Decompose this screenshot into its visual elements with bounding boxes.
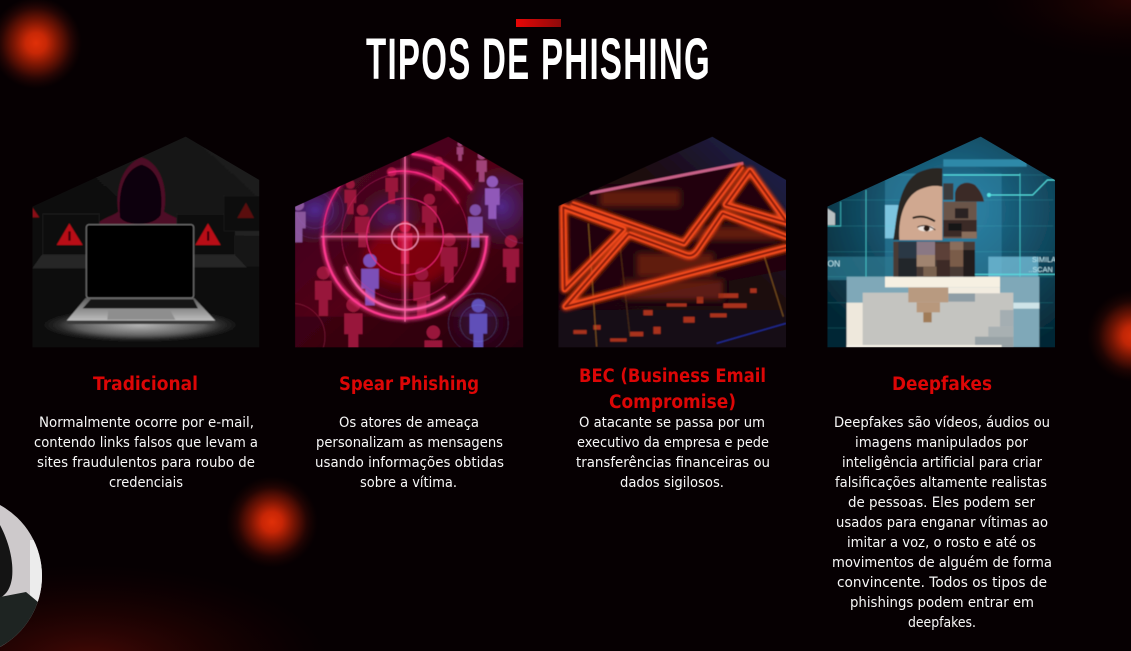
description: credenciais: [109, 475, 183, 491]
description: [34, 415, 258, 491]
description: Os atores de ameaça: [339, 415, 479, 431]
circuit glow below envelope: [573, 288, 757, 342]
title: TIPOS DE PHISHING: [366, 27, 710, 93]
description: Normalmente ocorre por e-mail,: [39, 415, 254, 431]
description: contendo links falsos que levam a: [34, 435, 258, 451]
description: [576, 415, 770, 491]
description: movimentos de alguém de forma: [832, 555, 1052, 571]
card 1: Tradicional: [34, 374, 258, 491]
heading: [579, 366, 766, 413]
top flap highlight: [590, 163, 743, 193]
description: imitar a voz, o rosto e até os: [847, 535, 1036, 551]
description: usados para enganar vítimas ao: [836, 515, 1048, 531]
description: imagens manipulados por: [855, 435, 1028, 451]
right face pixels: [943, 183, 984, 238]
description: Deepfakes são vídeos, áudios ou: [834, 415, 1050, 431]
description: sites fraudulentos para roubo de: [37, 455, 255, 471]
description: de pessoas. Eles podem ser: [848, 495, 1035, 511]
floor light: [44, 310, 236, 342]
description: O atacante se passa por um: [579, 415, 765, 431]
heading: Deepfakes: [892, 374, 992, 395]
description: phishings podem entrar em: [850, 595, 1034, 611]
description: sobre a vítima.: [360, 475, 457, 491]
side laptops: [32, 196, 261, 268]
image: deepfake pixelated face: ..SCAN: [1028, 265, 1053, 274]
scan grid: [827, 173, 1053, 347]
description: [315, 415, 504, 491]
heading: Compromise): [609, 392, 736, 413]
card 2: Spear Phishing: [315, 374, 504, 491]
image: deepfake pixelated face: SIMILA: [1032, 255, 1056, 264]
description: [832, 415, 1052, 631]
description: executivo da empresa e pede: [577, 435, 769, 451]
scan labels: ON: [827, 259, 840, 269]
description: convincente. Todos os tipos de: [837, 575, 1047, 591]
glow: top left: [0, 0, 84, 90]
card 3: BEC: [576, 366, 770, 491]
image: deepfake pixelated face: [827, 133, 1060, 350]
description: usando informações obtidas: [315, 455, 504, 471]
card 4: Deepfakes: [832, 374, 1052, 631]
description: transferências financeiras ou: [576, 455, 770, 471]
description: falsificações altamente realistas: [835, 475, 1047, 491]
glow: right edge: [1085, 288, 1131, 384]
lower face pixels: [893, 242, 975, 277]
people silhouettes: [295, 142, 520, 348]
image: hooded hacker and laptop: [30, 133, 263, 350]
description: dados sigilosos.: [620, 475, 724, 491]
description: deepfakes.: [908, 615, 976, 631]
heading: Spear Phishing: [339, 374, 479, 395]
presenter webcam: [0, 505, 42, 647]
description: personalizam as mensagens: [316, 435, 503, 451]
image: targeting reticle over people: [294, 136, 524, 348]
heading: BEC (Business Email: [579, 366, 766, 387]
main laptop: [67, 225, 215, 324]
shirt pixels: [847, 277, 1039, 347]
description: inteligência artificial para criar: [842, 455, 1042, 471]
left half of face: [893, 168, 942, 240]
envelope strokes: [563, 166, 787, 307]
glow: bottom centre: [225, 475, 319, 569]
heading: Tradicional: [93, 374, 198, 395]
reticle rings: [295, 150, 524, 348]
title accent bar: [516, 19, 561, 27]
hooded figure: [99, 157, 177, 224]
image: neon envelope: [557, 133, 790, 350]
